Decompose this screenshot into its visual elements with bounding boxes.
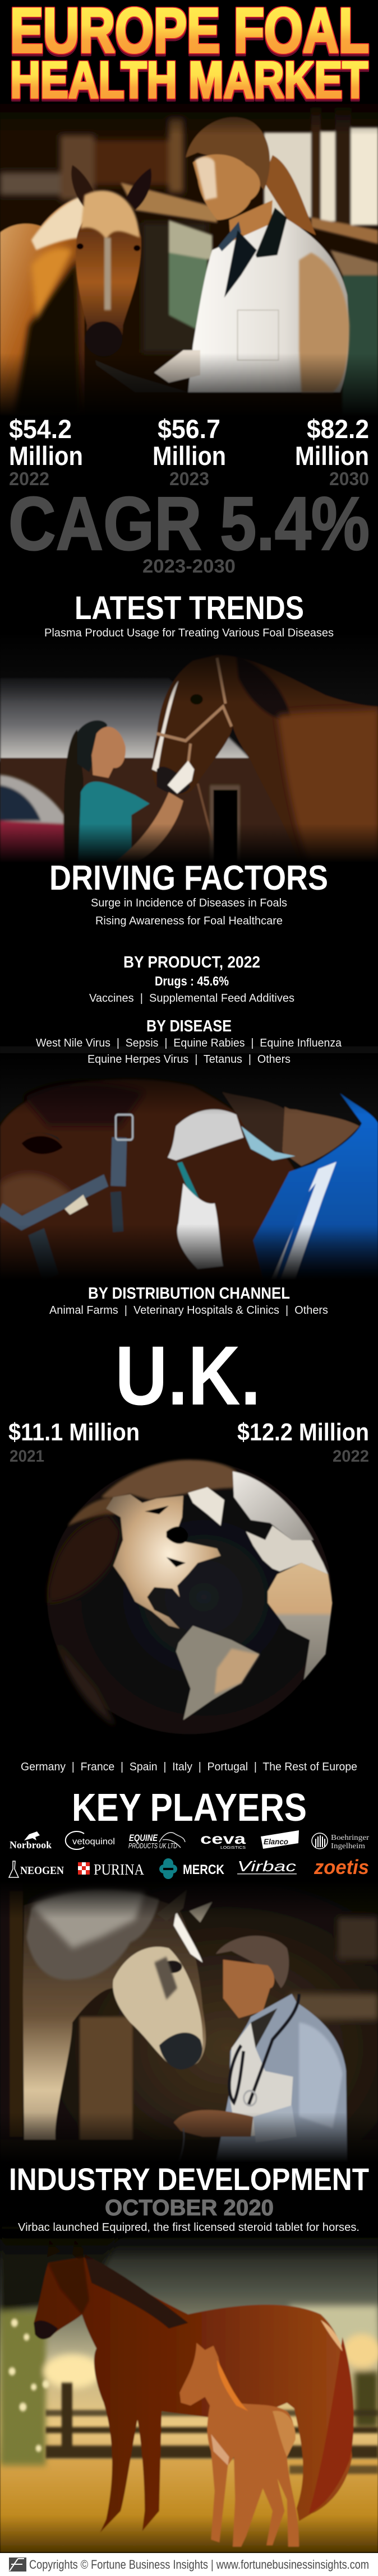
U.K. heading: U.K. — [115, 1328, 261, 1422]
logo: Elanco: Elanco — [264, 1837, 288, 1846]
by product: Drugs : 45.6% — [155, 974, 229, 988]
vet in teal scrubs — [64, 720, 194, 864]
South America — [176, 1626, 259, 1720]
vet in white coat — [174, 1936, 347, 2183]
left dark land — [48, 1514, 121, 1603]
veterinarian — [95, 117, 349, 392]
logo: Boehringer Ingelheim — [312, 1833, 369, 1850]
globe — [47, 1460, 333, 1735]
logo: Boehringer Ingelheim: Ingelheim — [331, 1842, 365, 1850]
logo: Virbac: Virbac — [237, 1858, 296, 1875]
syringe — [177, 1162, 205, 1217]
lower glove — [177, 1183, 223, 1269]
by product: Vaccines | Supplemental Feed Additives — [89, 992, 294, 1005]
by distribution channel: BY DISTRIBUTION CHANNEL — [88, 1285, 290, 1303]
vet — [220, 1069, 378, 1289]
bay horse — [152, 655, 378, 864]
logo: Zoetis: zoetis — [314, 1856, 369, 1878]
hero photo: veterinarian with horse in a stable — [0, 95, 378, 415]
stable photo: vet with grey horse — [0, 1882, 378, 2183]
by distribution channel — [49, 1285, 328, 1317]
footer — [0, 2553, 378, 2576]
trend photo fades — [0, 630, 378, 703]
logo: Equine Products: EQUINE — [129, 1833, 158, 1843]
grey horse — [23, 1890, 212, 2140]
2030 value: $82.2 — [307, 414, 369, 444]
2021 value: $11.1 Million — [8, 1419, 140, 1446]
Africa — [268, 1563, 333, 1680]
latest trends — [44, 590, 334, 639]
horse head — [76, 207, 141, 357]
company logos — [9, 1830, 369, 1879]
2022 value — [237, 1419, 369, 1466]
stable photo fades — [0, 1880, 378, 1919]
2022 value — [9, 414, 83, 489]
countries: Germany | France | Spain | Italy | Portugal | The Rest of Europe — [21, 1761, 357, 1773]
logo: Neogen: NEOGEN — [20, 1864, 64, 1877]
industry development — [9, 2161, 369, 2234]
logo: Ceva — [200, 1830, 246, 1850]
by product: BY PRODUCT, 2022 — [123, 954, 260, 971]
driving factors — [49, 859, 328, 927]
car — [0, 775, 64, 864]
hero fade into black — [0, 353, 378, 417]
driving factors: DRIVING FACTORS — [49, 859, 328, 898]
driving factors: Surge in Incidence of Diseases in Foals — [91, 897, 287, 909]
halter — [157, 658, 232, 764]
driving factors: Rising Awareness for Foal Healthcare — [95, 915, 283, 927]
CAGR figure: 2023-2030 — [142, 556, 236, 577]
logo: Boehringer Ingelheim: Boehringer — [331, 1834, 369, 1842]
2023 value — [153, 414, 226, 489]
Greenland — [188, 1487, 224, 1526]
industry development: OCTOBER 2020 — [105, 2196, 274, 2220]
2023 value: Million — [153, 441, 226, 471]
fence — [46, 2383, 378, 2474]
mare — [34, 2240, 354, 2532]
2030 value: Million — [295, 441, 369, 471]
logo: Norbrook: Norbrook — [10, 1839, 52, 1850]
by product — [89, 954, 294, 1005]
logo: Elanco — [261, 1830, 299, 1849]
2023 value: $56.7 — [158, 414, 220, 444]
pasture photo: mare and foal — [0, 2229, 378, 2552]
by distribution channel: Animal Farms | Veterinary Hospitals & Clinics | Others — [49, 1304, 328, 1317]
halter straps — [0, 1137, 119, 1277]
market size figures — [9, 414, 369, 489]
upper glove — [168, 1109, 243, 1160]
logo: Merck: MERCK — [183, 1862, 225, 1877]
2021 value — [8, 1419, 140, 1466]
logo: Neogen — [9, 1861, 64, 1877]
Europe — [246, 1526, 328, 1574]
logo: Virbac — [237, 1858, 297, 1875]
title — [10, 0, 369, 109]
logo: Merck — [159, 1858, 225, 1879]
logo: Norbrook — [10, 1831, 52, 1850]
top brown cap — [102, 1460, 243, 1500]
2023 value: 2023 — [169, 468, 209, 489]
2022 value: 2022 — [9, 468, 49, 489]
2022 value: Million — [9, 441, 83, 471]
2021 value: 2021 — [10, 1447, 44, 1466]
logo: Vetoquinol — [66, 1831, 115, 1849]
latest trends: Plasma Product Usage for Treating Various Foal Diseases — [44, 627, 334, 639]
2030 value — [295, 414, 369, 489]
trend photo: vet with bay horse — [0, 635, 378, 864]
logo: Purina: PURINA — [94, 1861, 144, 1878]
foal — [179, 2343, 299, 2547]
bokeh highlights — [8, 2319, 49, 2452]
by disease — [36, 1017, 342, 1066]
injection photo: vet treating horse — [0, 1046, 378, 1295]
North America — [106, 1494, 220, 1629]
logo: Ceva: ceva — [200, 1830, 246, 1847]
logo: Equine Products — [128, 1833, 185, 1850]
horse body and mane — [0, 165, 151, 415]
injection photo fades — [0, 1053, 378, 1115]
by disease: West Nile Virus | Sepsis | Equine Rabies | Equine Influenza — [36, 1037, 342, 1049]
2022 value: $54.2 — [9, 414, 72, 444]
icon: Fortune Business Insights logo — [9, 2558, 26, 2572]
2022 value: 2022 — [333, 1447, 369, 1466]
industry development: Virbac launched Equipred, the first licensed steroid tablet for horses. — [18, 2221, 359, 2234]
U.K. values — [8, 1419, 369, 1466]
latest trends: LATEST TRENDS — [75, 590, 304, 626]
by disease: Equine Herpes Virus | Tetanus | Others — [87, 1053, 291, 1066]
logo: Ceva: LOGISTICS — [220, 1846, 246, 1850]
Hudson Bay and Great Lakes — [145, 1506, 188, 1567]
right white cap — [233, 1471, 314, 1540]
logo: Equine Products: PRODUCTS UK LTD — [128, 1842, 177, 1850]
2030 value: 2030 — [329, 468, 369, 489]
logo: Vetoquinol: vetoquinol — [72, 1837, 115, 1847]
by disease: BY DISEASE — [146, 1017, 232, 1035]
key players heading: KEY PLAYERS — [72, 1785, 307, 1829]
